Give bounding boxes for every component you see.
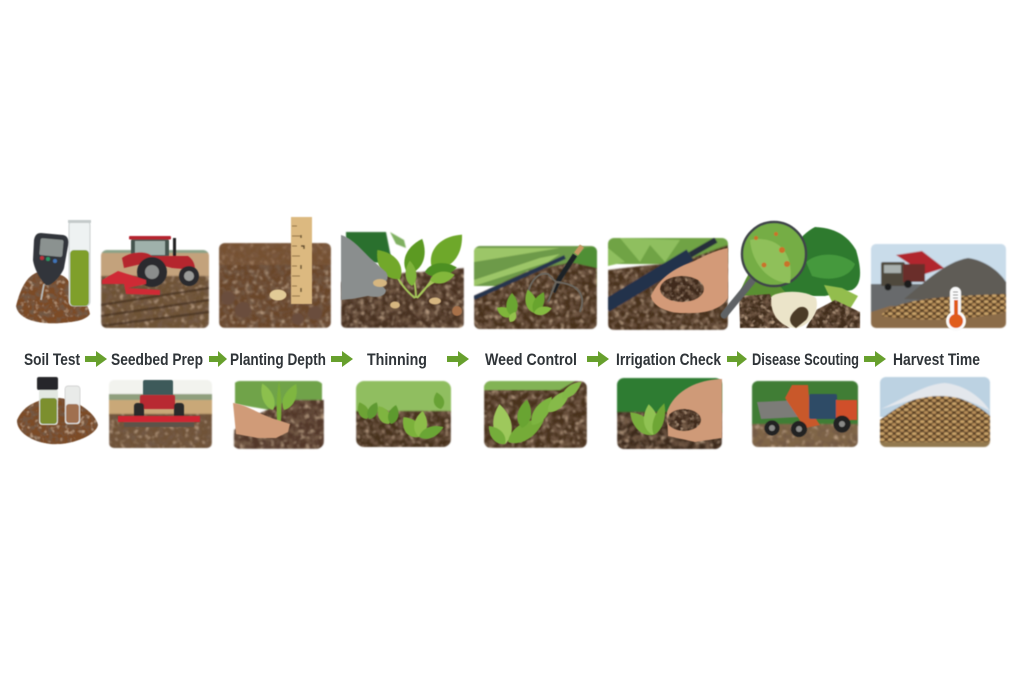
heading: Irrigation Check: Irrigation Check (616, 350, 721, 369)
tarp (881, 383, 990, 411)
icon: hands with soil (667, 379, 722, 442)
icon: capped green vial (37, 377, 58, 425)
seeds (373, 279, 441, 308)
soil pile (16, 272, 90, 323)
icon: thermometer (946, 287, 966, 331)
clods (221, 291, 322, 325)
heading: Seedbed Prep: Seedbed Prep (111, 350, 203, 369)
panel: soil sample vials (bottom row) (17, 377, 98, 444)
panel: harvest pile with thermometer (top row) (871, 244, 1006, 331)
panel: tractor front view (bottom row) (109, 380, 212, 450)
soil (739, 294, 860, 328)
icon: seedling (257, 381, 301, 432)
icon: green test tube (68, 220, 91, 306)
panel: covered beet pile (bottom row) (880, 377, 990, 448)
panel: thinned seedling rows (bottom row) (355, 381, 451, 449)
icon: seedling (625, 402, 669, 440)
arrow: disease scouting to harvest time (864, 351, 886, 367)
drip line (474, 257, 565, 298)
icon: seed (270, 290, 286, 300)
leaves (775, 227, 860, 296)
heading: Planting Depth: Planting Depth (230, 350, 326, 369)
arrow: seedbed prep to planting depth (209, 351, 227, 367)
heading: Disease Scouting: Disease Scouting (752, 350, 859, 369)
arrow: thinning to weed control (447, 351, 469, 367)
beet pile (880, 394, 990, 442)
icon: cupped hand with soil (651, 248, 728, 313)
heading: Weed Control: Weed Control (485, 350, 577, 369)
panel: hands checking soil and seedling (bottom row) (617, 378, 722, 450)
truck and loader (881, 251, 944, 290)
panel: weed control with hand fork (top row) (474, 246, 597, 330)
icon: brown sample vial (65, 386, 80, 424)
tractor (102, 236, 199, 295)
panel: harvester truck (bottom row) (752, 381, 858, 448)
icon: truck (757, 385, 857, 437)
icon: soil meter (33, 233, 68, 300)
icon: seedlings (355, 391, 446, 442)
panel: soil test meter and tube (top row) (16, 220, 91, 323)
icon: ruler (291, 217, 312, 304)
beet pile (882, 294, 1006, 319)
panel: planting depth with ruler (top row) (219, 217, 331, 328)
heading: Harvest Time: Harvest Time (893, 350, 980, 369)
arrow: irrigation check to disease scouting (727, 351, 747, 367)
icon: seedling (370, 227, 471, 298)
panel: irrigation check with hand (top row) (606, 238, 728, 330)
icon: gloved hand (341, 235, 388, 300)
icon: magnifying glass (724, 222, 806, 315)
ground (871, 306, 1006, 330)
icon: hand (233, 403, 290, 438)
panel: hand and seedling (bottom row) (233, 381, 324, 449)
icon: weed seedlings (495, 288, 553, 324)
arrow: weed control to irrigation check (587, 351, 609, 367)
panel: tractor with tiller (top row) (101, 236, 209, 330)
icon: beet root (771, 292, 817, 328)
tractor (118, 380, 200, 427)
heading: Soil Test: Soil Test (24, 350, 80, 369)
drip tube (606, 255, 690, 306)
heading: Thinning: Thinning (367, 350, 427, 369)
panel: weed-free seedlings (bottom row) (484, 378, 587, 449)
arrow: soil test to seedbed prep (85, 351, 107, 367)
panel: thinning with gloved hand (top row) (341, 227, 471, 328)
icon: hand fork (528, 246, 582, 312)
icon: seedling row (485, 378, 584, 449)
sky and field (101, 248, 209, 251)
arrow: planting depth to thinning (331, 351, 353, 367)
tarp pile (904, 258, 1006, 305)
panel: disease scouting with magnifier (top row) (724, 222, 860, 328)
label row with arrows (24, 350, 980, 369)
